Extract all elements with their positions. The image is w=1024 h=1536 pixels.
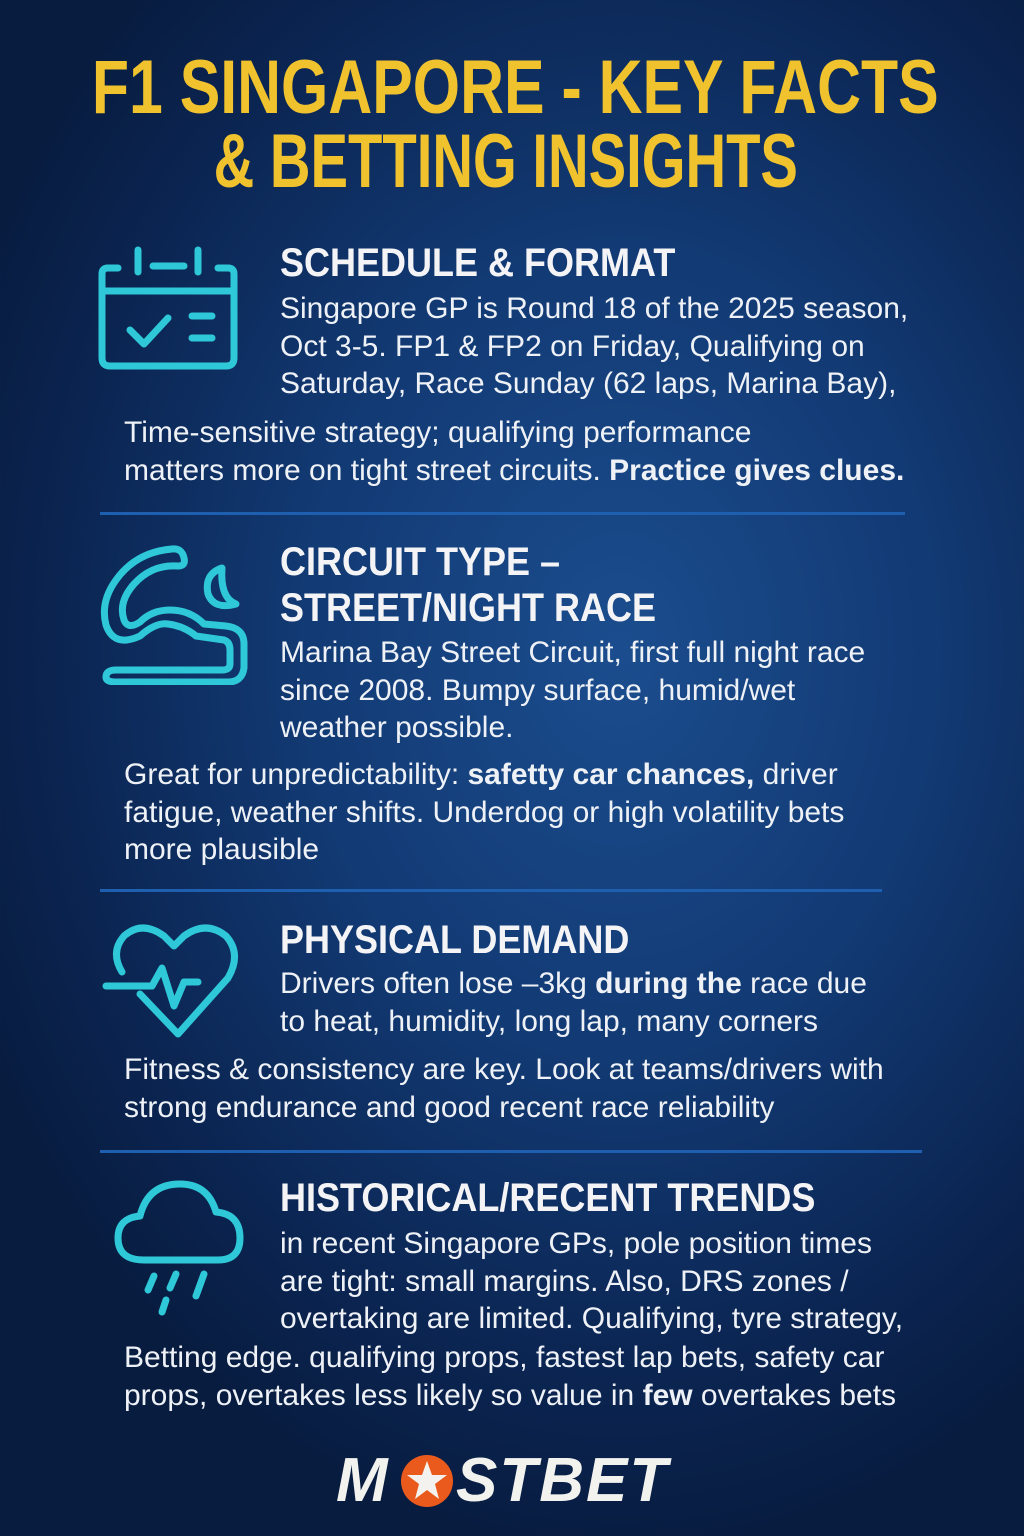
heading: circuit [280, 540, 656, 630]
logo: mostbet [336, 1446, 672, 1515]
text: physical body: to heat, humidity, long lap, many corners [280, 1005, 818, 1038]
text: schedule body: Saturday, Race Sunday (62 laps, Marina Bay), [280, 367, 896, 400]
title line 2: & BETTING INSIGHTS [214, 119, 798, 204]
text: trends body: overtaking are limited. Qualifying, tyre strategy, [280, 1302, 903, 1335]
text: circuit body: Marina Bay Street Circuit, first full night race [280, 636, 865, 669]
text: schedule body [280, 292, 908, 400]
icon: circuit with moon [100, 545, 248, 685]
icon: heart pulse [102, 924, 238, 1038]
text: physical body [280, 967, 867, 1038]
logo: mostbet: STBET [456, 1446, 669, 1515]
text: physical body: Drivers often lose ‒3kg during the race due [280, 967, 867, 1000]
text: circuit insight: fatigue, weather shifts. Underdog or high volatility bets [124, 796, 844, 829]
text: schedule insight [124, 416, 904, 487]
text: schedule body: Oct 3-5. FP1 & FP2 on Friday, Qualifying on [280, 330, 865, 363]
icon: star circle [401, 1455, 453, 1507]
heading: trends: HISTORICAL/RECENT TRENDS [280, 1176, 815, 1220]
text: schedule insight: Time-sensitive strategy; qualifying performance [124, 416, 751, 449]
text: circuit body [280, 636, 865, 744]
title: F1 SINGAPORE - KEY FACTS [92, 45, 939, 130]
heading: physical: PHYSICAL DEMAND [280, 918, 629, 962]
text: trends body: are tight: small margins. Also, DRS zones / [280, 1265, 849, 1298]
heading: circuit: CIRCUIT TYPE – [280, 540, 560, 584]
heading: circuit: STREET/NIGHT RACE [280, 586, 656, 630]
text: trends insight [124, 1341, 896, 1412]
text: physical insight: Fitness & consistency are key. Look at teams/drivers with [124, 1053, 884, 1086]
heading: schedule: SCHEDULE & FORMAT [280, 241, 675, 285]
text: circuit body: weather possible. [280, 711, 513, 744]
text: physical insight [124, 1053, 884, 1124]
text: trends body: in recent Singapore GPs, pole position times [280, 1227, 872, 1260]
text: circuit insight [124, 758, 844, 866]
icon: calendar [98, 246, 238, 370]
icon: rain cloud [114, 1180, 244, 1316]
text: trends body [280, 1227, 903, 1335]
text: schedule insight: matters more on tight street circuits. Practice gives clues. [124, 454, 904, 487]
text: trends insight: props, overtakes less likely so value in few overtakes bets [124, 1379, 896, 1412]
text: circuit body: since 2008. Bumpy surface, humid/wet [280, 674, 795, 707]
logo: mostbet: M [336, 1446, 390, 1515]
text: trends insight: Betting edge. qualifying props, fastest lap bets, safety car [124, 1341, 884, 1374]
text: circuit insight: more plausible [124, 833, 319, 866]
text: circuit insight: Great for unpredictability: safetty car chances, driver [124, 758, 838, 791]
text: schedule body: Singapore GP is Round 18 of the 2025 season, [280, 292, 908, 325]
text: physical insight: strong endurance and good recent race reliability [124, 1091, 774, 1124]
